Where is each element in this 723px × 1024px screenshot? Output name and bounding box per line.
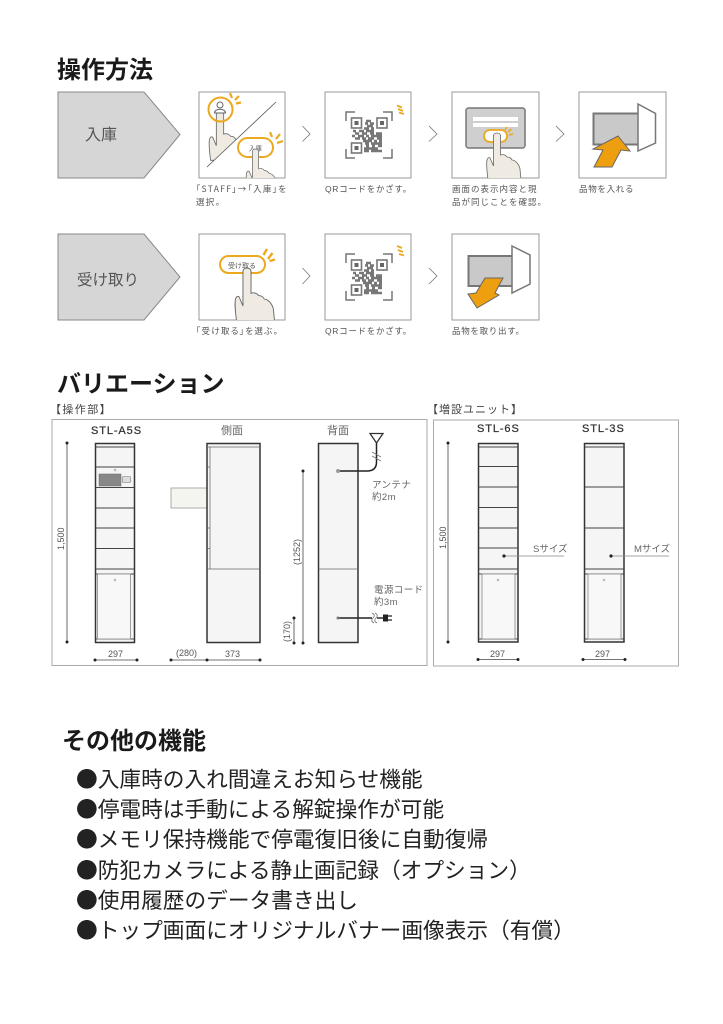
model name: STL-6S: STL-6S xyxy=(477,423,520,435)
feature 5: ●使用履歴のデータ書き出し xyxy=(76,884,358,915)
drawing: STL-A5S front xyxy=(96,444,134,642)
title: その他の機能: その他の機能 xyxy=(62,728,206,755)
panel: 操作部 xyxy=(52,420,427,666)
caption: confirm: 品が同じことを確認。 xyxy=(452,197,547,207)
arrow: chevron xyxy=(429,268,437,284)
step: STAFF and 入庫 selection: 入庫 xyxy=(249,144,262,152)
step: scan QR code xyxy=(325,92,411,178)
label: 増設ユニット: 【増設ユニット】 xyxy=(427,403,523,416)
model name: STL-3S: STL-3S xyxy=(582,423,625,435)
dimension: STL-3S width 297 xyxy=(582,649,626,661)
label: power cord: 電源コード xyxy=(374,585,424,596)
dimension: STL-6S width 297: 297 xyxy=(490,649,505,659)
icon: antenna with cable xyxy=(336,434,383,473)
step: select 受け取る xyxy=(199,234,285,322)
drawing: back view xyxy=(318,444,358,642)
feature 6: ●トップ画面にオリジナルバナー画像表示（有償） xyxy=(76,914,575,945)
arrow: chevron xyxy=(429,126,437,142)
feature 1: ●入庫時の入れ間違えお知らせ機能 xyxy=(76,763,423,794)
caption: scan QR: QRコードをかざす。 xyxy=(325,184,412,194)
row label: 受け取り: 受け取り xyxy=(77,271,139,289)
label: antenna: アンテナ xyxy=(372,480,411,491)
row label: 受け取り xyxy=(58,234,180,320)
arrow: chevron xyxy=(302,126,310,142)
drawing: side view xyxy=(171,444,260,642)
view label: 側面: 側面 xyxy=(221,424,243,437)
step: STAFF and 入庫 selection xyxy=(198,92,286,178)
feature 2: ●停電時は手動による解錠操作が可能 xyxy=(76,793,444,824)
label: antenna: 約2m xyxy=(372,491,396,503)
dimensions: 280 and 373 xyxy=(170,648,262,662)
caption: STAFF selection: 「STAFF」→「入庫」を xyxy=(196,183,287,195)
dimension: STL-6S width 297 xyxy=(476,649,520,661)
callout: Mサイズ xyxy=(609,543,671,558)
dimension: height 1,500: 1,500 xyxy=(438,526,448,549)
dimension: STL-3S width 297: 297 xyxy=(595,649,610,659)
dimension: width 297: 297 xyxy=(108,649,123,659)
caption: scan QR: QRコードをかざす。 xyxy=(325,326,412,336)
callout: Sサイズ xyxy=(502,543,568,558)
title: 操作方法: 操作方法 xyxy=(57,57,153,84)
step: take out item xyxy=(452,234,539,320)
feature 4: ●防犯カメラによる静止画記録（オプション） xyxy=(76,854,531,885)
dimensions: 280 and 373: (280) xyxy=(176,648,197,658)
caption: confirm: 画面の表示内容と現 xyxy=(452,184,538,194)
callout: Mサイズ: Mサイズ xyxy=(634,543,671,555)
arrow: chevron xyxy=(302,268,310,284)
caption: select 受け取る: 「受け取る」を選ぶ。 xyxy=(196,325,279,337)
row label: 入庫 xyxy=(58,92,180,178)
drawing: STL-3S front xyxy=(584,444,624,642)
dimension: height 1,500 xyxy=(438,442,450,644)
caption: STAFF selection: 選択。 xyxy=(196,196,221,208)
dimension: height 1,500 xyxy=(56,442,68,644)
label: 操作部: 【操作部】 xyxy=(50,402,112,416)
title: バリエーション: バリエーション xyxy=(57,371,225,398)
dimension: 170: (170) xyxy=(282,621,292,642)
arrow: chevron xyxy=(556,126,564,142)
step: insert item xyxy=(579,92,666,178)
panel: 増設ユニット xyxy=(434,420,678,666)
dimensions: 280 and 373: 373 xyxy=(225,649,240,659)
icon: power cord and plug xyxy=(336,613,392,623)
step: confirm screen xyxy=(452,92,539,180)
caption: insert item: 品物を入れる xyxy=(579,184,634,194)
step: select 受け取る: 受け取る xyxy=(228,261,256,270)
caption: take out item: 品物を取り出す。 xyxy=(452,326,525,336)
view label: 背面: 背面 xyxy=(327,423,349,437)
dimension: width 297 xyxy=(94,649,138,662)
row label: 入庫: 入庫 xyxy=(85,126,117,144)
feature 3: ●メモリ保持機能で停電復旧後に自動復帰 xyxy=(76,823,488,854)
dimension: 1252 xyxy=(292,470,304,644)
drawing: STL-6S front xyxy=(478,444,518,642)
feature list xyxy=(76,763,575,945)
model name: STL-A5S: STL-A5S xyxy=(91,425,142,437)
step: scan QR code xyxy=(325,234,411,320)
dimension: 1252: (1252) xyxy=(292,539,302,565)
dimension: 170 xyxy=(282,616,296,644)
dimension: height 1,500: 1,500 xyxy=(56,527,66,550)
callout: Sサイズ: Sサイズ xyxy=(533,543,568,555)
label: power cord: 約3m xyxy=(374,596,398,608)
